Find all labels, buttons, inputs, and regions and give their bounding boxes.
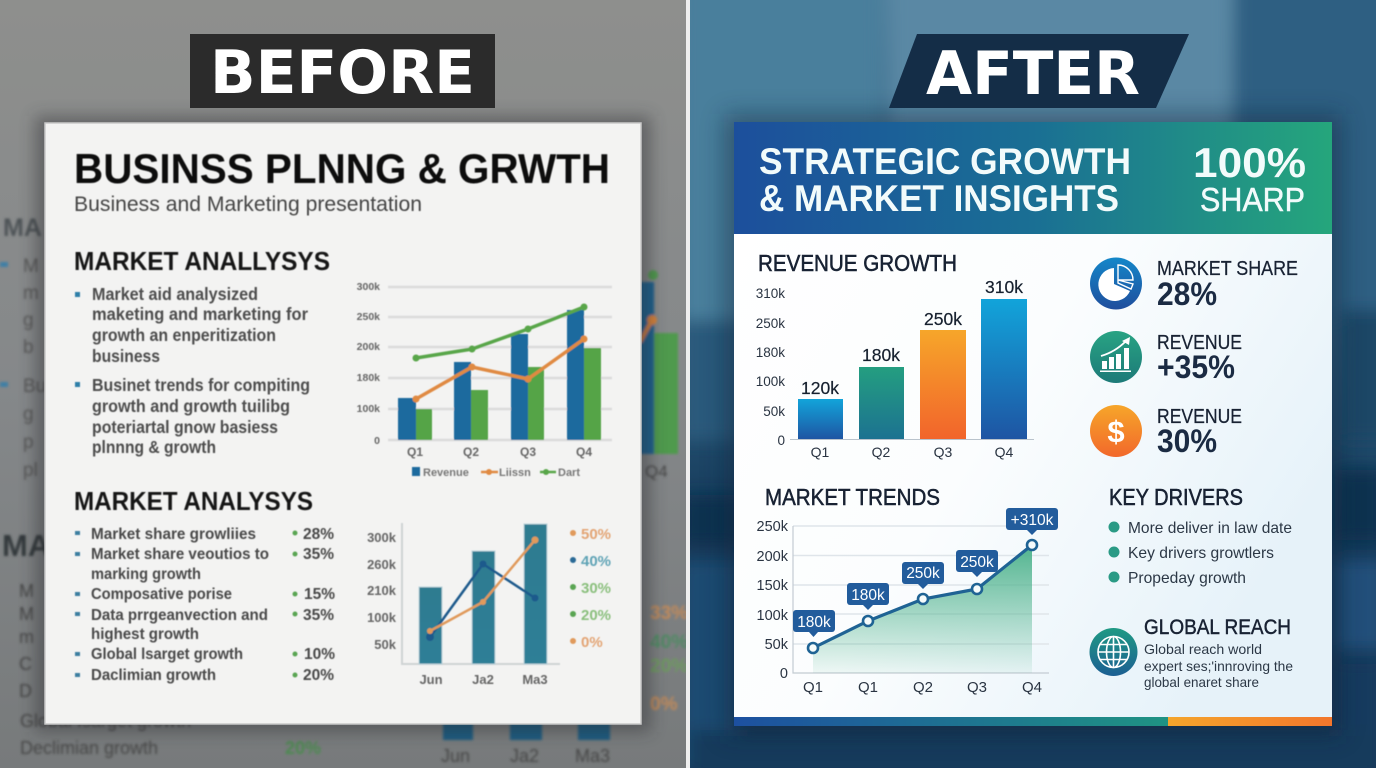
text block: market analysis table: Data prrgeanvection and — [91, 607, 268, 624]
chart: blurry revenue bars and lines: 300k — [357, 281, 380, 293]
chart: blurry market analysis: Jun — [419, 672, 443, 687]
chart: blurry revenue bars and lines — [357, 281, 612, 479]
text block: key drivers: More deliver in law date — [1128, 520, 1292, 537]
panel: before side background — [0, 0, 688, 768]
callouts: point values — [793, 508, 1058, 637]
panel: before side background: Declimian growth — [20, 738, 158, 758]
text block: market analysis table: Daclimian growth — [91, 667, 216, 684]
header banner: SHARP — [1200, 181, 1305, 218]
panel: before side background: b — [23, 337, 34, 358]
text block: market analysis table: 10% — [304, 646, 335, 663]
chart: revenue growth bars — [756, 277, 1034, 460]
text block: market analysis table: Global lsarget growth — [91, 646, 243, 663]
icon: growth chart — [1090, 331, 1142, 383]
panel: before side background: m — [23, 283, 39, 304]
chart: market trends area: 250k — [757, 519, 789, 535]
chart: blurry revenue bars and lines: Q2 — [463, 445, 479, 459]
chart: market trends area: 150k — [757, 578, 789, 594]
panel: before side background: M — [19, 581, 34, 601]
panel: before side background: Ma3 — [575, 746, 610, 766]
panel: before blurry document — [45, 123, 641, 724]
panel: before side background: M — [23, 256, 39, 277]
stat: market share: 28% — [1157, 276, 1217, 312]
text block: market analysis table: MARKET ANALYSYS — [74, 486, 313, 516]
text block: market analysis table: 15% — [304, 586, 335, 603]
header banner: & MARKET INSIGHTS — [759, 178, 1119, 219]
panel: before side background: C — [19, 654, 32, 674]
chart: blurry market analysis: 50k — [374, 637, 397, 652]
text block: global reach — [1090, 616, 1293, 690]
panel: before side background: Bu — [23, 376, 46, 397]
chart: blurry market analysis: 20% — [581, 607, 611, 624]
chart: market trends area: 100k — [757, 608, 789, 624]
chart: blurry revenue bars and lines: 180k — [357, 372, 380, 384]
text block: market analysis bullets: Market aid analysized — [92, 284, 258, 304]
icon: dollar: $ — [1107, 414, 1125, 449]
chart: revenue growth bars: 180k — [756, 345, 785, 360]
chart: revenue growth bars: 100k — [756, 374, 785, 389]
chart: blurry market analysis: 100k — [367, 610, 397, 625]
stat: revenue: 30% — [1157, 423, 1217, 459]
panel: before side background: 33% — [650, 603, 688, 624]
chart: blurry revenue bars and lines: 200k — [357, 341, 380, 353]
chart: blurry market analysis: 210k — [367, 583, 397, 598]
chart: revenue growth bars: Q3 — [934, 444, 953, 460]
chart: blurry revenue bars and lines: Q3 — [520, 445, 536, 459]
callouts: point values: 180k — [851, 587, 885, 604]
text block: key drivers: Propeday growth — [1128, 570, 1246, 587]
panel: before side background: MA — [2, 528, 50, 563]
text block: global reach: GLOBAL REACH — [1144, 616, 1291, 639]
chart: blurry market analysis: 30% — [581, 580, 611, 597]
panel: after infographic card — [734, 122, 1332, 726]
label: AFTER — [889, 34, 1189, 109]
chart: blurry market analysis: Ma3 — [522, 672, 548, 687]
stat: revenue up: +35% — [1157, 349, 1235, 385]
chart: revenue growth bars: 250k — [756, 316, 785, 331]
text block: market analysis bullets: plnnng & growth — [92, 437, 216, 457]
text block: market analysis bullets: maketing and marketing for — [92, 304, 308, 324]
chart: revenue growth bars: 250k — [924, 309, 962, 329]
footer color strip — [734, 717, 1332, 726]
chart: market trends area: Q4 — [1022, 679, 1042, 696]
panel: before side background: g — [23, 404, 34, 425]
icon: globe — [1090, 628, 1138, 676]
text block: market analysis table: Composative porise — [91, 586, 232, 603]
label: AFTER: AFTER — [926, 39, 1140, 109]
chart: market trends area: 0 — [780, 666, 788, 682]
text block: market analysis bullets: MARKET ANALLYSYS — [74, 246, 330, 276]
text block: market analysis bullets: poteriartal gnow basiess — [92, 417, 278, 437]
chart: market trends area: 50k — [765, 637, 789, 653]
chart: revenue growth bars: 310k — [985, 277, 1023, 297]
panel: before side background: MA — [3, 214, 42, 242]
chart: blurry revenue bars and lines: Dart — [558, 467, 580, 479]
panel: before side background: M — [19, 604, 34, 624]
chart: market trends area: Q2 — [913, 679, 933, 696]
text block: market analysis table: highest growth — [91, 626, 199, 643]
chart: blurry revenue bars and lines: Liissn — [499, 467, 531, 479]
chart: revenue growth bars: 180k — [862, 345, 900, 365]
callouts: point values: 250k — [906, 565, 940, 582]
text block: key drivers: KEY DRIVERS — [1109, 484, 1243, 510]
text block: market analysis table: 20% — [303, 667, 334, 684]
text block: global reach: expert ses;'innroving the — [1144, 658, 1293, 674]
header banner: STRATEGIC GROWTH — [759, 141, 1131, 182]
heading: revenue growth: REVENUE GROWTH — [758, 250, 957, 276]
panel: before side background: Global Isarget growth — [20, 711, 191, 731]
chart: revenue growth bars: Q2 — [872, 444, 891, 460]
text block: market analysis table: 35% — [303, 546, 334, 563]
text block: market analysis table: 35% — [303, 607, 334, 624]
title: business planning — [74, 145, 610, 216]
chart: blurry revenue bars and lines: 100k — [357, 403, 380, 415]
chart: blurry revenue bars and lines: 0 — [374, 435, 380, 447]
chart: blurry market analysis: 0% — [581, 634, 603, 651]
text block: market analysis bullets: growth an enperitization — [92, 325, 276, 345]
panel: before side background: pl — [23, 460, 38, 481]
stat: market share: MARKET SHARE — [1157, 258, 1298, 280]
panel: before side background: p — [23, 432, 34, 453]
icon: pie chart — [1090, 258, 1142, 310]
panel: after side background — [680, 0, 1376, 768]
chart: blurry market analysis: 260k — [367, 557, 397, 572]
chart: revenue growth bars: Q1 — [811, 444, 830, 460]
callouts: point values: 180k — [797, 614, 831, 631]
chart: market trends area — [757, 508, 1058, 696]
panel: before side background: m — [19, 627, 34, 647]
text block: key drivers: Key drivers growtlers — [1128, 545, 1274, 562]
panel: before side background: Jun — [441, 746, 470, 766]
text block: market analysis bullets: business — [92, 346, 160, 366]
chart: blurry revenue bars and lines: Q4 — [576, 445, 592, 459]
chart: blurry revenue bars and lines: 250k — [357, 311, 380, 323]
text block: market analysis table: Market share growliies — [91, 526, 256, 543]
chart: market trends area: Q1 — [803, 679, 823, 696]
panel: before side background: D — [19, 681, 32, 701]
header banner: 100% — [1193, 139, 1306, 186]
panel: before side background: g — [23, 310, 34, 331]
text block: market analysis bullets: growth and growth tuilibg — [92, 396, 290, 416]
header banner — [734, 122, 1332, 234]
chart: blurry market analysis: 50% — [581, 526, 611, 543]
chart: blurry market analysis — [367, 523, 611, 687]
text block: global reach: global enaret share — [1144, 674, 1259, 690]
icon: dollar — [1090, 405, 1142, 457]
chart: revenue growth bars: 120k — [801, 378, 839, 398]
panel: before side background: Q4 — [645, 462, 668, 481]
chart: market trends area: 200k — [757, 549, 789, 565]
text block: market analysis bullets — [74, 246, 330, 457]
panel: before side background: Ja2 — [510, 746, 539, 766]
chart: blurry revenue bars and lines: Revenue — [423, 467, 469, 479]
text block: market analysis bullets: Businet trends for compiting — [92, 375, 310, 395]
title: business planning: BUSINSS PLNNG & GRWTH — [74, 145, 610, 192]
divider — [686, 0, 690, 768]
chart: revenue growth bars: 310k — [756, 286, 785, 301]
label: BEFORE: BEFORE — [210, 38, 475, 108]
chart: market trends area: Q3 — [967, 679, 987, 696]
chart: blurry market analysis: Ja2 — [472, 672, 494, 687]
callouts: point values: 250k — [960, 554, 994, 571]
text block: market analysis table: 28% — [303, 526, 334, 543]
title: business planning: Business and Marketing presentation — [74, 193, 422, 216]
panel: before side background: 20% — [285, 738, 321, 758]
text block: market analysis table — [74, 486, 335, 684]
chart: blurry market analysis: 40% — [581, 553, 611, 570]
callouts: point values: +310k — [1011, 512, 1054, 529]
stat: revenue: REVENUE — [1157, 406, 1242, 428]
stat: revenue up — [1090, 331, 1242, 385]
chart: revenue growth bars: Q4 — [995, 444, 1014, 460]
chart: blurry market analysis: 300k — [367, 530, 397, 545]
text block: market analysis table: Market share veoutios to — [91, 546, 269, 563]
chart: revenue growth bars: 0 — [777, 433, 785, 448]
panel: before side background: 20% — [650, 656, 688, 677]
panel: before side background: 0% — [650, 694, 678, 715]
chart: revenue growth bars: 50k — [763, 404, 785, 419]
text block: global reach: Global reach world — [1144, 641, 1262, 657]
stat: revenue — [1090, 405, 1242, 459]
heading: market trends: MARKET TRENDS — [765, 484, 940, 510]
stat: revenue up: REVENUE — [1157, 332, 1242, 354]
stat: market share — [1090, 258, 1298, 312]
chart: blurry revenue bars and lines: Q1 — [407, 445, 423, 459]
text block: market analysis table: marking growth — [91, 566, 201, 583]
text block: key drivers — [1108, 484, 1292, 587]
chart: market trends area: Q1 — [858, 679, 878, 696]
panel: before side background: 40% — [650, 632, 688, 653]
